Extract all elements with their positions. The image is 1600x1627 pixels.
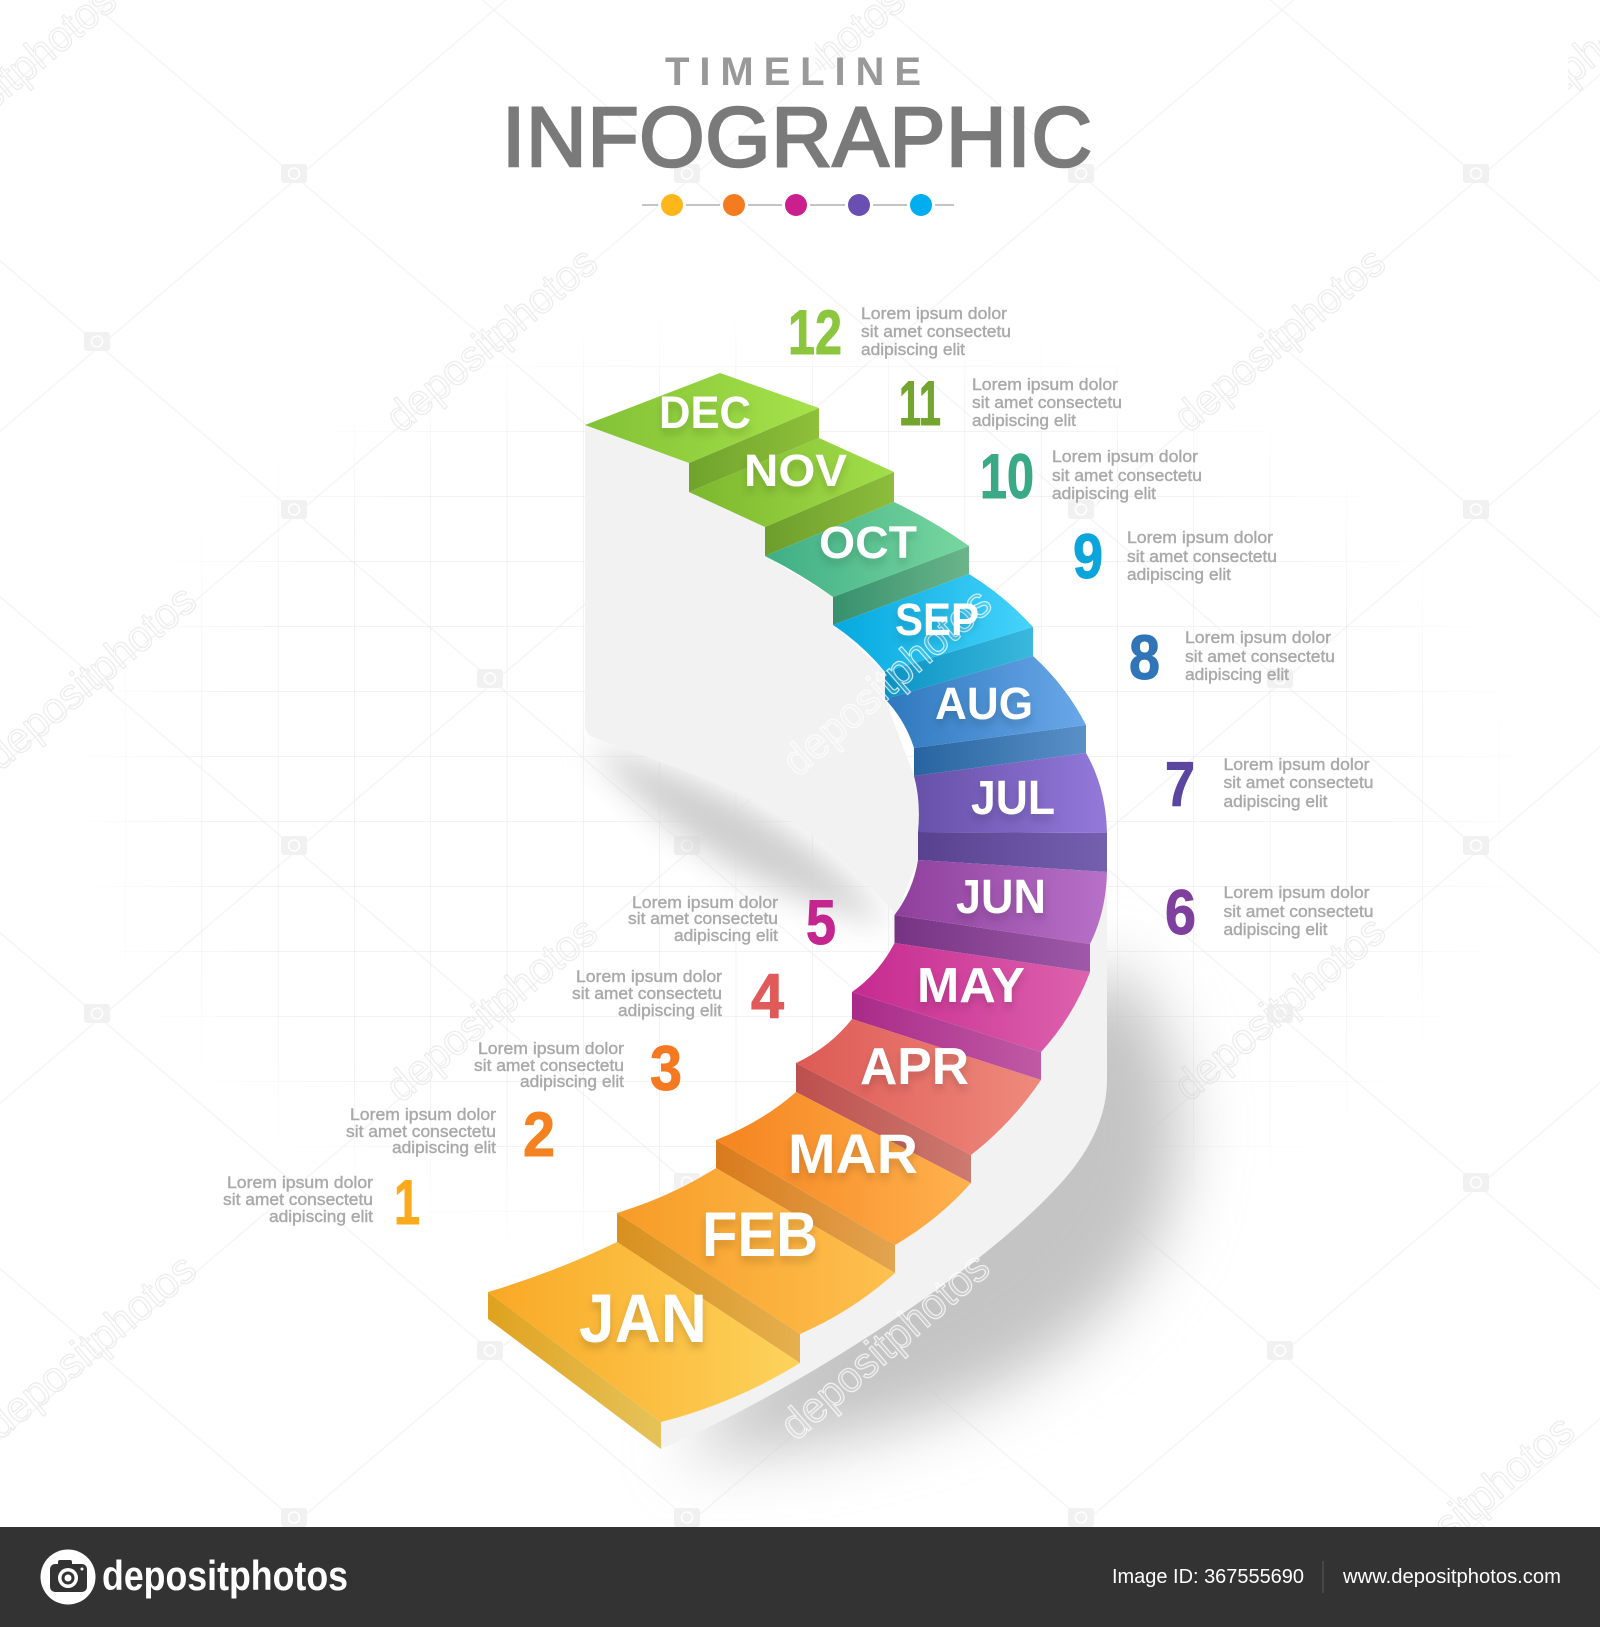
step: July <box>914 753 1107 872</box>
step: January <box>488 1242 800 1449</box>
text block 1 <box>223 1173 373 1226</box>
text block 2 <box>346 1105 496 1157</box>
website: www.depositphotos.com <box>1342 1566 1561 1588</box>
text block 9: Lorem ipsum dolor <box>1127 528 1273 547</box>
text block 8 <box>1185 628 1335 684</box>
number 6: 6 <box>1165 878 1196 948</box>
text block 5: sit amet consectetu <box>628 909 778 928</box>
text block 3: sit amet consectetu <box>474 1056 624 1075</box>
month label JAN: JAN <box>579 1280 707 1357</box>
text block 12: sit amet consectetu <box>861 322 1011 341</box>
text block 7: Lorem ipsum dolor <box>1224 755 1370 774</box>
number 10: 10 <box>980 442 1034 512</box>
text block 10: adipiscing elit <box>1052 484 1156 503</box>
icon: camera logo <box>40 1550 96 1604</box>
footer bar <box>0 1527 1600 1627</box>
text block 2: Lorem ipsum dolor <box>350 1105 496 1124</box>
staircase illustration <box>488 373 1181 1455</box>
text block 11: adipiscing elit <box>972 411 1076 430</box>
staircase body: upper curved wall <box>585 425 919 915</box>
step: March <box>716 1092 971 1273</box>
step: October <box>765 502 969 625</box>
number 3: 3 <box>650 1034 682 1104</box>
text block 5 <box>628 893 778 945</box>
text block 11: Lorem ipsum dolor <box>972 375 1118 394</box>
month label FEB: FEB <box>702 1200 818 1270</box>
text block 1: sit amet consectetu <box>223 1190 373 1209</box>
text block 2: sit amet consectetu <box>346 1122 496 1141</box>
watermark layer: depositphotos <box>1165 907 1395 1111</box>
text block 10: Lorem ipsum dolor <box>1052 447 1198 466</box>
text block 5: adipiscing elit <box>674 926 778 945</box>
title: TIMELINE: TIMELINE <box>665 50 921 94</box>
watermark layer: depositphotos <box>377 908 607 1112</box>
month label SEP: SEP <box>895 594 979 645</box>
month label JUL: JUL <box>971 772 1055 825</box>
number 4: 4 <box>751 962 784 1032</box>
month label MAR: MAR <box>788 1122 918 1185</box>
text block 9: adipiscing elit <box>1127 565 1231 584</box>
text block 12 <box>861 304 1011 359</box>
number 2: 2 <box>523 1100 555 1170</box>
text block 10 <box>1052 447 1202 503</box>
text block 6: adipiscing elit <box>1224 920 1328 939</box>
text block 12: Lorem ipsum dolor <box>861 304 1007 323</box>
step: August <box>885 656 1086 776</box>
number 9: 9 <box>1073 522 1103 592</box>
number 11: 11 <box>899 369 941 439</box>
title divider with coloured dots <box>642 194 954 216</box>
text block 5: Lorem ipsum dolor <box>632 893 778 912</box>
text block 1: adipiscing elit <box>269 1207 373 1226</box>
text block 6: sit amet consectetu <box>1224 902 1374 921</box>
text block 8: adipiscing elit <box>1185 665 1289 684</box>
number 5: 5 <box>806 888 836 958</box>
text block 9 <box>1127 528 1277 584</box>
watermark over stairs: depositphotos <box>773 579 1001 786</box>
watermark over stairs <box>771 579 1001 1450</box>
month label OCT: OCT <box>819 517 917 568</box>
text block 1: Lorem ipsum dolor <box>227 1173 373 1192</box>
text block 7 <box>1224 755 1374 811</box>
text block 3: adipiscing elit <box>520 1072 624 1091</box>
watermark layer: depositphotos <box>1165 238 1395 442</box>
step: June <box>894 860 1107 972</box>
shadow under the lower staircase <box>680 960 1181 1455</box>
watermark layer: depositphotos <box>1354 1406 1584 1610</box>
text block 7: sit amet consectetu <box>1224 773 1374 792</box>
step: February <box>617 1168 895 1363</box>
watermark over stairs: depositphotos <box>771 1243 999 1450</box>
footer logo wordmark: depositphotos <box>102 1552 348 1599</box>
text block 6 <box>1224 883 1374 939</box>
month label AUG: AUG <box>935 678 1033 729</box>
text block 8: Lorem ipsum dolor <box>1185 628 1331 647</box>
shadow under the upper staircase <box>590 745 890 925</box>
step: December <box>585 373 819 492</box>
step: November <box>689 438 894 556</box>
text block 12: adipiscing elit <box>861 340 965 359</box>
image id: Image ID: 367555690 <box>1112 1566 1304 1588</box>
step: May <box>852 943 1090 1080</box>
watermark layer: depositphotos <box>377 238 607 442</box>
number 7: 7 <box>1165 750 1195 820</box>
text block 10: sit amet consectetu <box>1052 466 1202 485</box>
staircase body: lower curved wall <box>661 870 1107 1449</box>
month label APR: APR <box>860 1038 969 1096</box>
text block 11: sit amet consectetu <box>972 393 1122 412</box>
text block 3 <box>474 1039 624 1091</box>
number 8: 8 <box>1129 623 1160 693</box>
month label JUN: JUN <box>956 871 1046 924</box>
text block 7: adipiscing elit <box>1224 792 1328 811</box>
text block 4: sit amet consectetu <box>572 984 722 1003</box>
text block 4: Lorem ipsum dolor <box>576 967 722 986</box>
step: April <box>796 1019 1041 1183</box>
text block 2: adipiscing elit <box>392 1138 496 1157</box>
text block 11 <box>972 375 1122 430</box>
month label NOV: NOV <box>744 445 847 496</box>
text block 3: Lorem ipsum dolor <box>478 1039 624 1058</box>
text block 4 <box>572 967 722 1020</box>
text block 8: sit amet consectetu <box>1185 647 1335 666</box>
title: INFOGRAPHIC: INFOGRAPHIC <box>502 90 1092 184</box>
month label MAY: MAY <box>917 959 1025 1013</box>
text block 6: Lorem ipsum dolor <box>1224 883 1370 902</box>
month label DEC: DEC <box>659 387 751 438</box>
number 1: 1 <box>394 1168 420 1238</box>
step: September <box>833 574 1033 699</box>
text block 9: sit amet consectetu <box>1127 547 1277 566</box>
text block 4: adipiscing elit <box>618 1001 722 1020</box>
number 12: 12 <box>788 298 842 368</box>
